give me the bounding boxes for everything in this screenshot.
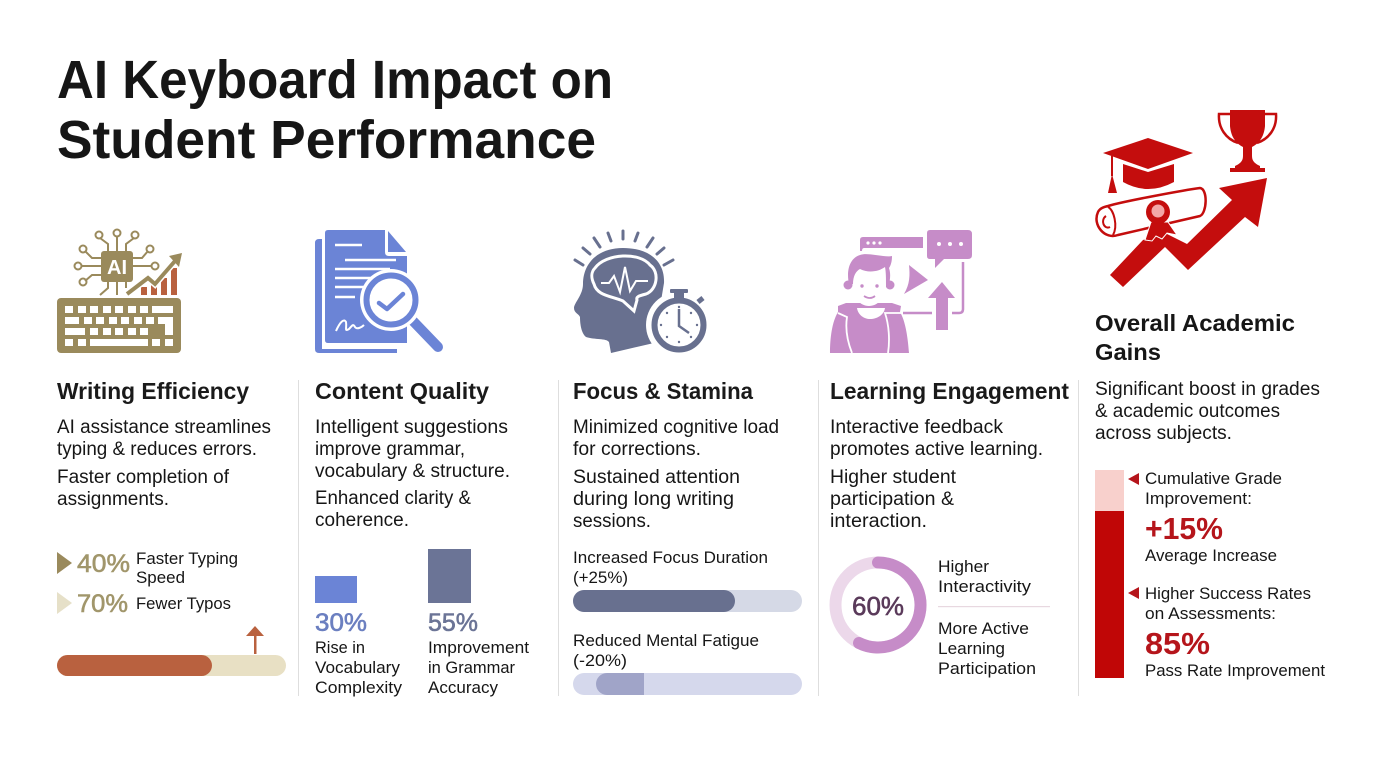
bar: grammar: Accuracy — [428, 678, 498, 697]
bar: vocabulary: Vocabulary — [315, 658, 400, 677]
text block: Minimized cognitive load — [573, 417, 779, 438]
text block: for corrections. — [573, 439, 701, 460]
icon: AI keyboard — [57, 230, 182, 353]
text block: Interactive feedback — [830, 417, 1004, 438]
title — [57, 50, 613, 170]
vertical bar — [1095, 470, 1124, 678]
icon: AI keyboard: AI — [107, 257, 127, 279]
stat: success rates: 85% — [1145, 626, 1210, 661]
bar: focus duration — [573, 548, 802, 612]
text block: improve grammar, — [315, 439, 465, 460]
text block: & academic outcomes — [1095, 401, 1280, 422]
text block: participation & — [830, 489, 954, 510]
donut labels: Participation — [938, 659, 1036, 678]
bar: vocabulary: Rise in — [315, 638, 365, 657]
stat: grade improvement: Improvement: — [1145, 489, 1252, 508]
stat: grade improvement — [1128, 469, 1282, 565]
panel: content quality — [315, 230, 529, 697]
stat: 70% fewer typos — [57, 590, 231, 618]
text block: vocabulary & structure. — [315, 461, 510, 482]
heading — [1095, 310, 1295, 365]
title: Student Performance — [57, 110, 596, 170]
stat: success rates: on Assessments: — [1145, 604, 1276, 623]
text block — [573, 417, 779, 532]
icon: head with stopwatch — [574, 231, 712, 358]
bar: mental fatigue — [573, 631, 802, 695]
heading: Content Quality — [315, 378, 489, 404]
icon: graduation, trophy, rising arrow — [1096, 110, 1276, 287]
bar: focus duration: Increased Focus Duration — [573, 548, 768, 567]
stat: 40% faster typing — [57, 549, 238, 587]
text block — [1095, 379, 1320, 444]
stat: 40% faster typing: Speed — [136, 568, 185, 587]
bar: mental fatigue: Reduced Mental Fatigue — [573, 631, 759, 650]
stat: success rates: Pass Rate Improvement — [1145, 661, 1325, 680]
panel: focus and stamina — [573, 231, 802, 695]
icon: student with interaction — [830, 230, 972, 353]
panel: overall academic gains — [1095, 110, 1325, 680]
stat: 70% fewer typos: Fewer Typos — [136, 594, 231, 613]
heading: Focus & Stamina — [573, 378, 753, 404]
text block — [830, 417, 1043, 532]
stat: success rates: Higher Success Rates — [1145, 584, 1311, 603]
text block: assignments. — [57, 489, 169, 510]
stat: 40% faster typing: 40% — [77, 550, 130, 578]
bar: vocabulary — [315, 576, 403, 697]
text block: AI assistance streamlines — [57, 417, 271, 438]
heading: Gains — [1095, 339, 1161, 365]
text block — [57, 417, 271, 510]
text block: promotes active learning. — [830, 439, 1043, 460]
panel: writing efficiency — [57, 230, 286, 676]
text block: typing & reduces errors. — [57, 439, 257, 460]
bar: focus duration: (+25%) — [573, 568, 628, 587]
donut labels: Interactivity — [938, 577, 1032, 596]
bar: grammar: 55% — [428, 609, 478, 637]
bar: vocabulary: 30% — [315, 609, 367, 637]
donut labels: Higher — [938, 557, 989, 576]
bar: grammar: in Grammar — [428, 658, 515, 677]
panel: learning engagement — [830, 230, 1069, 678]
text block: Enhanced clarity & — [315, 488, 471, 509]
stat: success rates — [1128, 584, 1325, 680]
text block: Higher student — [830, 467, 957, 488]
donut labels: More Active — [938, 619, 1029, 638]
text block: during long writing — [573, 489, 734, 510]
text block: across subjects. — [1095, 423, 1232, 444]
bar: vocabulary: Complexity — [315, 678, 403, 697]
donut labels — [938, 557, 1050, 678]
stat: grade improvement: Cumulative Grade — [1145, 469, 1282, 488]
donut chart: 60%: 60% — [852, 591, 904, 621]
bar: mental fatigue: (-20%) — [573, 651, 627, 670]
stat: grade improvement: +15% — [1145, 511, 1223, 546]
donut chart: 60% — [836, 562, 921, 648]
stat: 70% fewer typos: 70% — [77, 590, 128, 618]
text block: Intelligent suggestions — [315, 417, 508, 438]
text block: interaction. — [830, 511, 927, 532]
bar: grammar: Improvement — [428, 638, 529, 657]
heading: Learning Engagement — [830, 378, 1069, 404]
text block: Faster completion of — [57, 467, 230, 488]
text block: Sustained attention — [573, 467, 740, 488]
text block: Significant boost in grades — [1095, 379, 1320, 400]
arrow: up — [246, 626, 264, 654]
text block — [315, 417, 510, 531]
icon: document with magnifier — [315, 230, 438, 353]
stat: grade improvement: Average Increase — [1145, 546, 1277, 565]
text block: sessions. — [573, 511, 651, 532]
progress bar — [57, 655, 286, 676]
heading: Writing Efficiency — [57, 378, 249, 404]
text block: coherence. — [315, 510, 409, 531]
stat: 40% faster typing: Faster Typing — [136, 549, 238, 568]
bar: grammar — [428, 549, 529, 697]
title: AI Keyboard Impact on — [57, 50, 613, 110]
heading: Overall Academic — [1095, 310, 1295, 336]
donut labels: Learning — [938, 639, 1005, 658]
